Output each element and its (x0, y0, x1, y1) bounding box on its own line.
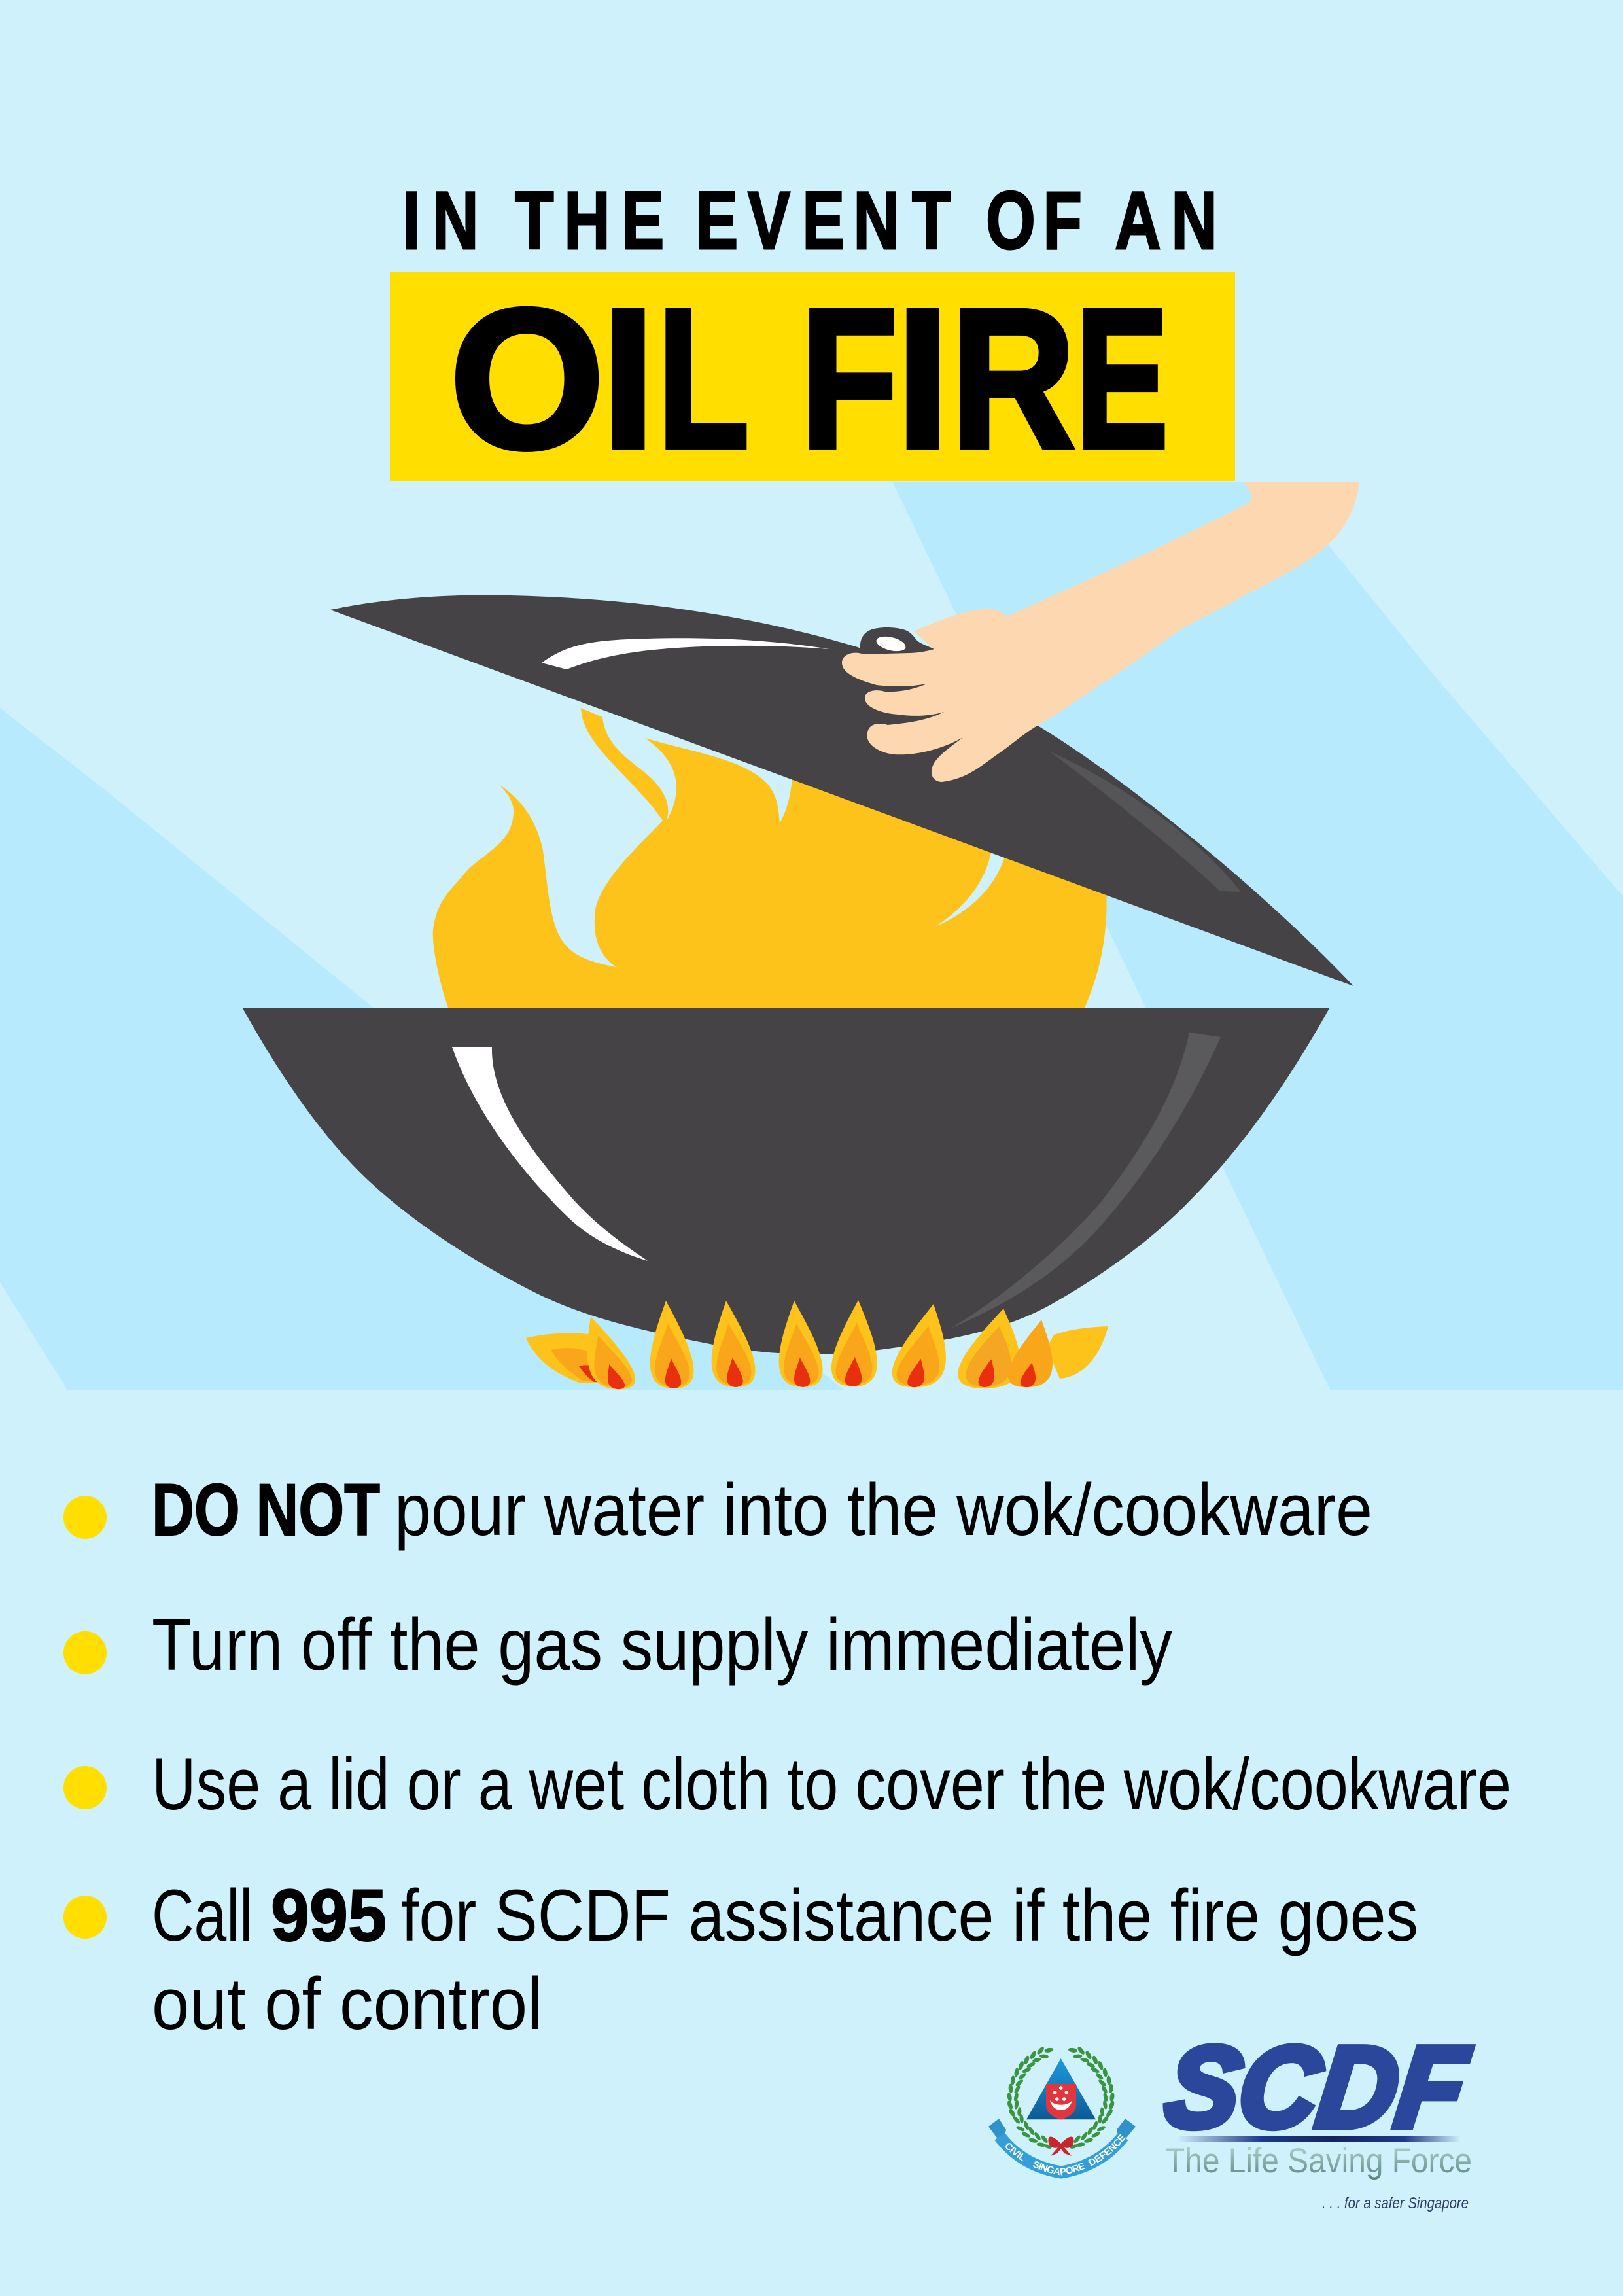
illustration: burner flames (526, 1300, 1108, 1389)
flame 4 (773, 1301, 825, 1387)
heading: oil fire yellow banner: I (602, 268, 655, 490)
blue triangle (1026, 2058, 1096, 2119)
ribbon with motto (988, 2119, 1136, 2179)
illustration: flame inside the wok (433, 708, 1107, 1008)
rule under wordmark (1177, 2136, 1461, 2142)
bullet 1 (63, 1469, 1372, 1551)
icon: lid handle (860, 627, 934, 654)
flame 2 (644, 1301, 695, 1388)
slogan: . . . for a safer Singapore (1322, 2195, 1469, 2212)
ribbon with motto: CIVIL (1005, 2143, 1023, 2162)
red bow (1048, 2136, 1074, 2156)
wok grey highlight (951, 1033, 1221, 1328)
flame 5 (830, 1300, 881, 1386)
logo: SCDF wordmark: SCDF (1159, 2024, 1475, 2151)
wok white highlight (452, 1047, 648, 1261)
illustration: wok (243, 1008, 1329, 1354)
heading: oil fire yellow banner: F (801, 268, 898, 490)
bullet 4 (63, 1875, 1418, 2045)
bullet 4: Call (152, 1875, 253, 1956)
flame 1 (569, 1316, 640, 1389)
heading: oil fire yellow banner: I (896, 268, 949, 490)
bullet 1: DO NOT (152, 1469, 380, 1551)
ribbon with motto: DEFENCE (1088, 2133, 1126, 2166)
heading: oil fire yellow banner: R (951, 268, 1075, 490)
logo: civil defence crest (988, 2047, 1136, 2179)
bullet 1: pour water into the wok/cookware (394, 1469, 1372, 1551)
flame 7 (954, 1309, 1034, 1388)
heading: oil fire yellow banner: L (657, 268, 749, 490)
title: in the event of an: IN THE EVENT OF AN (402, 175, 1217, 266)
lid white highlight (542, 638, 829, 669)
bullet 4: out of control (152, 1963, 542, 2045)
heading: oil fire yellow banner (390, 272, 1235, 481)
tagline: The Life Saving Force (1166, 2142, 1472, 2180)
heading: oil fire yellow banner: E (1075, 268, 1168, 490)
bullet 4: 995 (271, 1875, 387, 1956)
laurel wreath (1006, 2045, 1115, 2149)
heading: oil fire yellow banner: O (450, 268, 604, 490)
far left flame (526, 1333, 605, 1383)
red shield (1046, 2084, 1076, 2120)
bullet list (63, 1469, 1511, 2045)
illustration: hand holding the lid (842, 482, 1359, 782)
logo: SCDF wordmark (1159, 2024, 1475, 2212)
flame 3 (705, 1301, 758, 1387)
bullet 2: Turn off the gas supply immediately (152, 1604, 1172, 1686)
illustration: wok lid (330, 595, 1353, 986)
ribbon with motto: SINGAPORE (1033, 2161, 1086, 2176)
flame 6 (888, 1304, 960, 1387)
lid grey highlight (1049, 751, 1241, 892)
far right flame (1047, 1326, 1108, 1379)
flame 8 (1005, 1320, 1063, 1387)
bullet 4: for SCDF assistance if the fire goes (401, 1875, 1418, 1956)
